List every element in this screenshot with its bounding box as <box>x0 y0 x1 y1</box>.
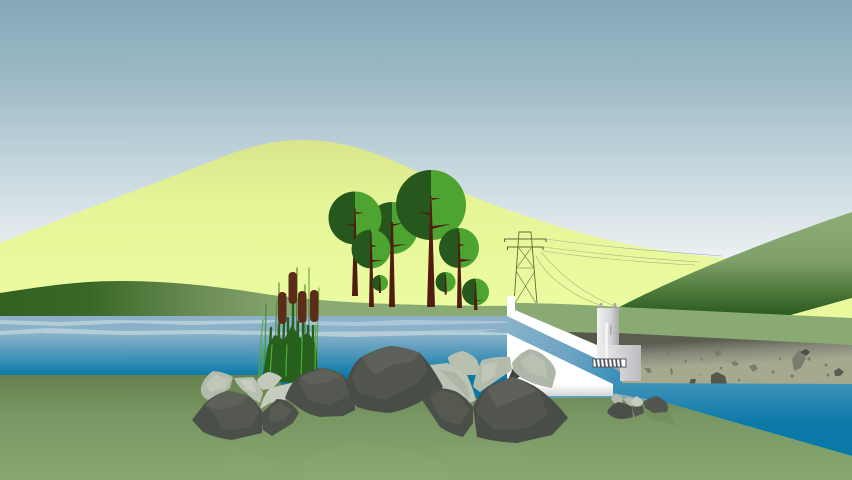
tree 2 <box>366 202 418 307</box>
concrete aggregate stones <box>644 349 844 384</box>
right hill <box>606 212 852 316</box>
sky <box>0 0 852 320</box>
yellow hill <box>0 140 725 320</box>
reeds <box>259 268 319 384</box>
tree 6 <box>372 275 388 293</box>
dark rock F <box>473 377 568 443</box>
tree 4 <box>352 230 390 307</box>
reed dense base <box>262 325 318 384</box>
small dark rock right <box>643 396 668 413</box>
dam parapet <box>507 296 600 360</box>
dark gap <box>508 368 522 382</box>
cattails <box>278 272 318 324</box>
dark rock A <box>192 391 263 440</box>
dark rock D <box>347 346 443 413</box>
water edge by dam <box>530 396 613 398</box>
pylon <box>504 232 546 303</box>
tree 1 <box>328 192 382 296</box>
light rock 1 <box>201 371 233 400</box>
small light rocks <box>611 394 644 408</box>
tree 8 <box>462 278 489 310</box>
lower river <box>613 383 852 456</box>
light rocks left <box>201 371 295 409</box>
small rock cluster <box>607 394 668 419</box>
tree 5 <box>439 228 479 308</box>
light rocks right <box>430 349 556 403</box>
concrete wall <box>618 333 852 385</box>
ground light reflections <box>215 442 540 480</box>
grate <box>593 359 626 367</box>
light rock 8 <box>512 349 556 388</box>
light rock 2 <box>234 377 263 403</box>
dam structure <box>507 296 641 397</box>
yellow field bottom right <box>787 298 852 320</box>
main water <box>0 316 510 400</box>
light rock 3 <box>257 372 282 390</box>
dam lower wall <box>507 333 613 397</box>
reed upper strands <box>268 304 313 382</box>
tower base <box>597 345 641 381</box>
dark rock B <box>262 399 299 436</box>
light rock 5 <box>430 363 476 403</box>
power lines <box>536 239 722 306</box>
water ripples <box>0 320 508 337</box>
small dark rock middle <box>632 406 644 417</box>
tree 3 <box>396 170 466 307</box>
light rock 6 <box>448 351 480 375</box>
spillway water <box>507 316 622 392</box>
tower <box>597 303 619 361</box>
shadow behind dam <box>568 332 600 348</box>
left dark hill <box>0 281 515 320</box>
small dark rock left <box>607 402 633 419</box>
light rock 7 <box>473 357 512 392</box>
tree group <box>328 170 489 310</box>
foreground ground <box>0 375 852 480</box>
tree 7 <box>436 272 456 294</box>
reed highlights <box>261 325 316 378</box>
reed blades back <box>259 268 319 378</box>
dark rock C <box>285 368 355 417</box>
dark rock E <box>422 388 473 437</box>
light rock 4 <box>260 382 295 409</box>
ground rock shadow <box>640 410 675 425</box>
right bank <box>514 303 852 346</box>
